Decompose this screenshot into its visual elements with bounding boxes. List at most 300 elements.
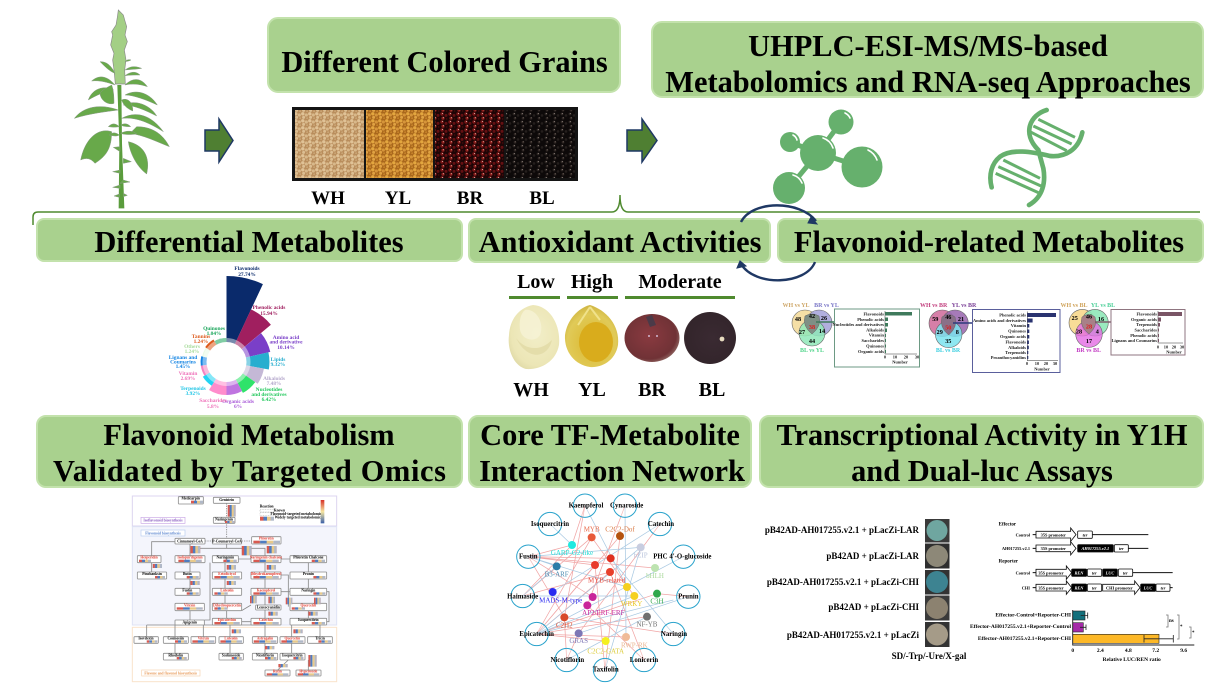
plant illustration — [74, 10, 169, 208]
bar chart: BR comparison: Organic acids — [1000, 334, 1026, 339]
transcription factor labels: MADS-M-type — [539, 596, 582, 604]
metabolite labels — [507, 503, 711, 674]
heading: Transcriptional Activity: Transcriptional Activity in Y1H — [776, 418, 1188, 452]
heading: Core TF-Metabolite — [469, 416, 751, 488]
venn: WH/YL/BR vs BL: 46 — [1086, 314, 1092, 320]
pathway nodes: Leucocyanidin — [257, 606, 280, 610]
Y1H assay labels: pB42AD + pLacZi-LAR — [826, 551, 919, 561]
axis labels — [970, 612, 1187, 663]
antioxidant levels and seeds — [509, 271, 736, 401]
construct labels: REN — [1075, 570, 1084, 575]
Y1H assay labels — [765, 525, 919, 640]
construct labels: ter — [1119, 546, 1124, 551]
seed BR — [624, 314, 680, 362]
bar chart: BL comparison: Saccharides — [1135, 328, 1157, 332]
venn: WH/BR/BL vs YL: 48 — [795, 316, 801, 323]
pathway nodes: Dihydroquercetin — [213, 603, 241, 607]
rose chart labels: Tannins — [192, 334, 210, 340]
venn: WH/YL/BL vs BR: WH vs BR — [920, 303, 948, 309]
pathway nodes: Fustin — [182, 588, 192, 592]
venn: WH/BR/BL vs YL: 38 — [809, 324, 815, 331]
seed labels: BL — [699, 379, 725, 401]
venn: WH/YL/BR vs BL: BR vs BL — [1076, 348, 1101, 354]
rose chart labels: 9.32% — [271, 362, 285, 368]
dual-luciferase constructs: CHI — [1022, 585, 1030, 590]
construct labels: ter — [1092, 570, 1097, 575]
transcription factor labels: bHLH — [646, 572, 664, 580]
venn: WH/YL/BR vs BL: 25 — [1072, 315, 1078, 322]
metabolite labels: Epicatechin — [519, 631, 554, 638]
dual-luciferase constructs: Control — [1016, 570, 1031, 575]
bar chart: BR comparison: Alkaloids — [1008, 345, 1026, 350]
heading: UHPLC-ESI-MS/MS — [652, 22, 1203, 99]
venn: WH/BR/BL vs YL: 27 — [799, 329, 805, 336]
bar chart: BL comparison: 0 — [1157, 344, 1160, 350]
venn: WH/BR/BL vs YL: WH vs YL — [782, 303, 810, 309]
construct labels — [1038, 532, 1166, 590]
arrow: grains to omics — [627, 119, 657, 162]
bar chart: YL comparison: Saccharides — [862, 338, 884, 343]
pathway nodes: Astragalin — [257, 637, 273, 641]
venn: WH/YL/BL vs BR: 21 — [958, 316, 964, 323]
venn: WH/YL/BR vs BL: 28 — [1076, 328, 1082, 336]
transcription factor labels: AP2/ERF-ERF — [582, 609, 625, 617]
grain labels: YL — [385, 188, 411, 209]
axis labels: 0 — [1071, 648, 1074, 654]
arrow: plant to grains — [205, 119, 233, 162]
grain swatch YL — [366, 110, 433, 178]
venn: WH/YL/BL vs BR: 8 — [956, 329, 959, 336]
metabolite labels: Taxifolin — [593, 667, 619, 674]
axis labels: 2.4 — [1097, 648, 1104, 654]
venn: WH/BR/BL vs YL: 26 — [821, 315, 827, 322]
rose chart labels: Phenolic acids — [253, 305, 285, 311]
dual-luciferase constructs: AH017255.v2.1 — [1002, 546, 1030, 551]
bar chart: BL comparison: Phenolic acids — [1130, 333, 1157, 338]
rose chart labels: 3.92% — [186, 391, 200, 397]
pathway section labels — [141, 517, 200, 676]
bar chart: BL comparison — [1095, 310, 1185, 355]
construct labels: LUC — [1143, 585, 1152, 590]
rose chart labels: 10.14% — [277, 345, 295, 351]
axis labels: Relative LUC/REN ratio — [1103, 657, 1161, 663]
pathway nodes: Hesperidin — [140, 556, 158, 560]
axis labels: 7.2 — [1152, 648, 1159, 654]
transcription factor labels: RWP-RK — [621, 641, 648, 649]
heading: Flavonoid Metabolism: Flavonoid Metabolism — [103, 418, 395, 452]
metabolite labels: Naringin — [661, 631, 687, 638]
seed WH — [509, 305, 559, 369]
bar chart: YL comparison: 10 — [893, 354, 898, 360]
rose chart labels: 1.24% — [194, 339, 208, 345]
venn: WH/YL/BR vs BL — [1060, 303, 1115, 354]
axis labels: 4.8 — [1125, 648, 1132, 654]
bar chart: YL comparison: Phenolic acids — [857, 317, 884, 322]
dual-luciferase constructs: Reporter — [999, 559, 1019, 564]
pathway nodes: Vitexin — [198, 637, 209, 641]
rose chart labels: Amino acid — [273, 335, 299, 341]
venn: WH/BR/BL vs YL: 44 — [809, 338, 815, 345]
construct labels: 35S promoter — [1038, 570, 1064, 575]
rose chart labels: Saccharides — [199, 398, 227, 404]
venn: WH/YL/BR vs BL: 4 — [1096, 328, 1099, 336]
significance brackets: * — [1192, 631, 1195, 636]
pathway legend: Widely targeted metabolomics — [275, 516, 323, 520]
rose chart labels: Quinones — [203, 326, 225, 332]
bar chart: BR comparison: Vitamin — [1011, 323, 1027, 328]
rose chart labels: 1.24% — [185, 349, 199, 355]
bar chart: BR comparison: 10 — [1035, 361, 1040, 366]
seed labels: WH — [513, 379, 549, 401]
construct labels: ter — [1161, 585, 1166, 590]
metabolite labels: Nicotiflorin — [550, 657, 584, 664]
construct labels: 35S promoter — [1038, 585, 1064, 590]
Y1H medium label: SD/-Trp/-Ure/X-gal — [892, 651, 967, 661]
panel: isoflavonoid biosynthesis — [132, 496, 337, 526]
heading: Flavonoid Metabolism: Validated by Targeted Omics — [53, 454, 446, 488]
bar chart: BR comparison: 20 — [1044, 361, 1049, 366]
pathway nodes: Dihydrokaempferol — [251, 572, 281, 576]
construct labels: CHI promoter — [1106, 585, 1133, 590]
construct shapes — [1036, 528, 1170, 594]
heading: Flavonoid-related Metabolites: Flavonoid-related Metabolites — [794, 225, 1184, 259]
icon: molecule — [773, 110, 882, 204]
bar chart: YL comparison: Vitamin — [869, 332, 885, 338]
construct labels: ter — [1123, 570, 1128, 575]
seed YL — [565, 305, 618, 367]
metabolite labels: Lonicerin — [630, 657, 658, 664]
rose chart labels: Flavonoids — [234, 266, 260, 272]
heading: UHPLC-ESI-MS/MS: UHPLC-ESI-MS/MS-based — [748, 29, 1108, 63]
construct labels: 35S promoter — [1041, 546, 1066, 551]
transcription factor labels: bZIP — [634, 552, 648, 560]
pathway legend: Known — [274, 509, 285, 513]
transcription factor labels: NF-YB — [637, 620, 658, 628]
bar chart: BR comparison: 30 — [1053, 361, 1058, 366]
bar chart: BL comparison: Organic acids — [1131, 317, 1157, 322]
bar chart: YL comparison: 20 — [904, 354, 909, 360]
pathway map: flavonoid metabolism — [132, 496, 337, 682]
pathway nodes: Isoquercitrin — [298, 618, 319, 622]
level labels: High — [571, 271, 613, 293]
heading: Flavonoid Metabolism — [37, 416, 462, 488]
venn: WH/YL/BR vs BL: 16 — [1098, 316, 1104, 323]
Y1H assay labels: pB42AD-AH017255.v2.1 + pLacZi-CHI — [767, 577, 919, 587]
pathway nodes: Rhoifolin — [168, 653, 183, 657]
grain swatch BR — [435, 110, 504, 178]
error bars — [1080, 612, 1173, 642]
metabolite labels: Prunin — [678, 594, 699, 601]
significance brackets: * — [1180, 625, 1183, 630]
bar chart: BL comparison: Lignans and Coumarins — [1112, 338, 1157, 343]
pathway nodes: Prunin — [303, 572, 314, 576]
bar chart: BL comparison: 20 — [1172, 344, 1177, 350]
heading: Differential Metabolites: Differential Metabolites — [94, 225, 404, 259]
rose chart labels: 27.74% — [238, 272, 256, 278]
venn: WH/YL/BR vs BL: YL vs BL — [1091, 303, 1115, 309]
pathway nodes — [134, 497, 332, 676]
dual-luciferase constructs — [999, 522, 1173, 594]
bracket linking upper row to lower row — [33, 195, 1200, 225]
pathway nodes: Quercetin — [301, 603, 316, 607]
network edges — [523, 506, 688, 670]
pathway nodes: Naringin — [301, 588, 315, 592]
Y1H plate photographs — [925, 519, 950, 647]
venn: WH/YL/BL vs BR: 46 — [945, 314, 951, 321]
bar chart: BR comparison — [953, 310, 1060, 372]
pathway nodes: Quercetin — [285, 637, 300, 641]
gene heatmap tiles — [153, 505, 321, 667]
pathway nodes: Catechin — [259, 618, 273, 622]
seed labels: YL — [578, 379, 606, 401]
metabolite nodes — [511, 494, 700, 682]
venn: WH/YL/BL vs BR: 59 — [932, 316, 938, 323]
circular arrows — [737, 205, 817, 280]
metabolite labels: Cynaroside — [610, 503, 643, 510]
metabolite labels: Isoquercitrin — [531, 521, 569, 528]
pathway nodes: Apigenin — [183, 621, 197, 625]
pathway nodes: Naringenin chalcone — [250, 556, 282, 560]
pathway nodes: Genistein — [219, 498, 234, 502]
bar chart: YL comparison: Nucleotides and derivatives — [833, 322, 884, 327]
dual-luciferase constructs: Effector — [999, 522, 1017, 527]
venn: WH/YL/BL vs BR: YL vs BR — [952, 303, 977, 309]
grain labels: BR — [457, 188, 483, 209]
transcription factor labels: B3-ARF — [545, 571, 569, 579]
pathway legend — [260, 500, 324, 523]
pathway nodes: Scolimoside — [222, 653, 241, 657]
pathway nodes: Epicatechin — [218, 618, 236, 622]
pathway nodes: Naringenin — [215, 517, 233, 521]
metabolite labels: Fustin — [519, 554, 538, 561]
construct labels: REN — [1075, 585, 1084, 590]
bar chart: YL comparison — [816, 309, 920, 367]
level labels — [517, 271, 722, 293]
transcription factor labels: C3H — [650, 597, 664, 605]
transcription factor labels: C2C2-GATA — [587, 648, 624, 656]
rose chart labels: Alkaloids — [263, 376, 285, 382]
level labels: Moderate — [638, 271, 722, 293]
bar chart: BL comparison: 10 — [1164, 344, 1169, 350]
construct labels: 35S promoter — [1041, 532, 1066, 537]
pathway nodes: Vitexin — [184, 603, 195, 607]
pathway nodes: Luteolin — [220, 588, 234, 592]
icon: DNA helix — [990, 110, 1082, 205]
venn: WH/YL/BR vs BL: 17 — [1086, 338, 1092, 345]
heading: Transcriptional Activity: and Dual-luc Assays — [851, 454, 1113, 488]
transcription factor labels — [539, 526, 664, 656]
pathway nodes: Butin — [183, 572, 192, 576]
seed labels: BR — [638, 379, 666, 401]
rose chart labels: and derivative — [269, 340, 303, 346]
venn: WH/BR/BL vs YL: 42 — [809, 313, 815, 320]
rose chart labels: Coumarins — [170, 360, 196, 366]
grain labels: BL — [529, 188, 555, 209]
grain swatch WH — [295, 110, 364, 178]
construct labels: AH017255.v2.1 — [1081, 546, 1109, 551]
seed BL — [684, 312, 736, 364]
venn: WH/YL/BL vs BR: 35 — [945, 338, 951, 345]
bar chart: YL comparison: 30 — [915, 354, 920, 360]
bar chart: BL comparison: Number — [1166, 350, 1182, 354]
venn: WH/YL/BL vs BR: 29 — [937, 329, 943, 336]
heading: Core TF-Metabolite: Core TF-Metabolite — [480, 418, 740, 452]
rose chart labels — [169, 266, 303, 410]
bar chart: BR comparison: Flavonoids — [1006, 340, 1026, 344]
level bars — [509, 296, 735, 299]
pathway nodes: Pinobanksin — [142, 572, 162, 576]
bar chart: YL comparison: Number — [892, 360, 908, 364]
venn: WH/YL/BL vs BR: 50 — [945, 324, 951, 332]
Y1H assay labels: pB42AD + pLacZi-CHI — [828, 602, 919, 612]
heading: Different Colored Grains — [268, 18, 620, 92]
panel: flavonoid biosynthesis — [132, 527, 337, 625]
venn: WH/YL/BL vs BR — [920, 303, 977, 354]
metabolite labels: PHC 4'-O-glucoside — [653, 554, 711, 561]
pathway nodes: Medicarpin — [182, 497, 200, 501]
pathway section labels: Flavonoid biosynthesis — [145, 531, 181, 535]
rose chart labels: 6.42% — [262, 397, 276, 403]
bar chart: BR comparison: Amino acids and derivatives — [973, 318, 1026, 323]
bar chart: relative LUC/REN ratio — [970, 610, 1195, 663]
rose chart labels: Vitamin — [179, 371, 197, 377]
bar chart: YL comparison: Flavonoids — [864, 312, 884, 316]
bar chart: YL comparison: Alkaloids — [866, 328, 884, 332]
heading: Transcriptional Activity — [760, 416, 1203, 488]
rose chart labels: Nucleotides — [256, 387, 282, 393]
transcription factor labels: WRKY — [621, 600, 642, 608]
venn: WH/YL/BR vs BL: 28 — [1086, 324, 1092, 330]
level labels: Low — [517, 271, 555, 293]
bar chart: YL comparison: Quinones — [866, 344, 884, 348]
venn: WH/BR/BL vs YL — [782, 303, 839, 354]
construct labels: LUC — [1105, 570, 1114, 575]
rose chart labels: 6% — [234, 404, 242, 410]
bar chart: YL comparison: Organic acids — [858, 349, 884, 354]
rose chart labels: 7.48% — [267, 381, 281, 387]
pathway nodes: Luteolin — [224, 637, 238, 641]
rose chart labels: 5.8% — [207, 404, 219, 410]
seed labels — [513, 379, 725, 401]
pathway nodes: Eriodictyol — [218, 572, 236, 576]
rose chart labels: Lipids — [271, 357, 285, 363]
transcription factor labels: C2H2 — [556, 621, 573, 629]
Y1H assay labels: pB42AD-AH017255.v2.1 + pLacZi-LAR — [765, 525, 919, 535]
rose chart labels: 2.69% — [181, 376, 195, 382]
heading: Different Colored Grains: Different Colored Grains — [281, 45, 608, 79]
venn: WH/YL/BL vs BR: BL vs BR — [936, 348, 961, 354]
transcription factor labels: C2C2-Dof — [605, 526, 635, 534]
metabolite labels: Catechin — [648, 521, 674, 528]
construct labels: ter — [1092, 585, 1097, 590]
bar chart: BR comparison: Phenolic acids — [999, 312, 1026, 318]
bar chart: BR comparison: Terpenoids — [1005, 350, 1026, 355]
rose chart labels: Lignans and — [169, 355, 197, 361]
rose chart labels: 1.45% — [176, 364, 190, 370]
pathway nodes: Rutin — [273, 670, 282, 674]
pathway connectors — [147, 503, 329, 670]
rose chart labels: 1.04% — [207, 331, 221, 337]
transcription factor labels: GARP-G2-like — [551, 549, 593, 557]
heading: Core TF-Metabolite: Interaction Network — [479, 454, 745, 488]
transcription factor labels: GRAS — [569, 637, 588, 645]
rose chart labels: Others — [184, 344, 200, 350]
axis labels: Effector-AH017255.v2.1+Reporter-Control — [970, 624, 1071, 630]
bar chart: BR comparison: 0 — [1026, 361, 1029, 366]
rose chart labels: 15.94% — [260, 311, 278, 317]
bar chart: YL comparison: 0 — [884, 354, 887, 360]
bar chart: BL comparison: 30 — [1180, 344, 1185, 350]
pathway section labels: Isoflavonoid biosynthesis — [143, 519, 183, 523]
dual-luciferase constructs: Control — [1016, 532, 1031, 537]
transcription factor labels: MYB-related — [588, 576, 626, 584]
pathway section labels: Flavone and flavonol biosynthesis — [144, 671, 197, 675]
grain swatch BL — [506, 110, 575, 178]
pathway nodes: Isovitexin — [138, 637, 154, 641]
venn: WH/BR/BL vs YL: BR vs YL — [814, 303, 839, 309]
pathway legend: Reaction — [260, 504, 274, 508]
bar chart: BR comparison: Proanthocyanidins — [991, 355, 1026, 360]
heading: Differential Metabolites — [37, 219, 462, 261]
grain labels — [311, 188, 555, 209]
Y1H assay labels: pB42AD-AH017255.v2.1 + pLacZi — [787, 630, 919, 640]
significance brackets — [1166, 615, 1195, 639]
venn: WH/BR/BL vs YL: 14 — [819, 328, 825, 335]
significance brackets: ns — [1169, 619, 1174, 624]
bars — [1073, 611, 1159, 643]
bar chart: BR comparison: Quinones — [1008, 328, 1026, 334]
bar chart: BL comparison: Flavonoids — [1136, 312, 1157, 316]
venn: WH/YL/BR vs BL: WH vs BL — [1060, 303, 1088, 309]
transcription factor nodes — [549, 532, 661, 645]
pathway nodes: Isoliquiritigenin — [177, 556, 203, 560]
pathway nodes: Phloretin — [259, 537, 274, 541]
pathway nodes: Kaempferol — [257, 588, 275, 592]
construct labels: ter — [1083, 532, 1088, 537]
grain photographs — [292, 107, 578, 181]
network: TF-metabolite interactions — [507, 494, 711, 682]
grain labels: WH — [311, 188, 345, 209]
pathway nodes: Hyperoside — [299, 670, 318, 674]
axis labels: 9.6 — [1180, 648, 1187, 654]
heading: UHPLC-ESI-MS/MS: Metabolomics and RNA-seq Approaches — [665, 65, 1191, 99]
transcription factor labels: MYB — [584, 526, 600, 534]
axis labels: Effector-AH017255.v2.1+Reporter-CHI — [978, 636, 1071, 642]
pathway nodes: Cinnamoyl-CoA — [177, 539, 203, 543]
rose chart labels: Organic acids — [222, 399, 254, 405]
rose chart labels: Terpenoids — [180, 386, 206, 392]
axis labels: Effector-Control+Reporter-CHI — [995, 612, 1071, 618]
rose chart labels: and derivatives — [251, 392, 287, 398]
pathway nodes: Cosmosiin — [168, 637, 184, 641]
panel: flavone and flavonol biosynthesis — [132, 627, 337, 682]
bar chart: BR comparison: Number — [1034, 366, 1050, 372]
pathway nodes: Naringenin — [216, 556, 234, 560]
venn: WH/BR/BL vs YL: BL vs YL — [800, 348, 824, 354]
pathway nodes: Tricin — [315, 637, 325, 641]
metabolite labels: Kaempferol — [569, 503, 603, 510]
pathway nodes: Nicotiflorin — [256, 653, 274, 657]
heading: Antioxidant Activities: Antioxidant Activities — [479, 225, 762, 259]
bar chart: BL comparison: Terpenoids — [1136, 322, 1157, 327]
metabolite labels: Haimaside — [507, 593, 538, 600]
pathway legend: Flavonoid-targeted metabolomics — [271, 512, 323, 516]
pathway nodes: Phloretin Chalcone — [293, 556, 324, 560]
rose chart: differential metabolites — [169, 266, 303, 410]
axes — [1073, 610, 1194, 645]
pathway nodes: P-Coumaroyl-CoA — [212, 539, 242, 543]
pathway nodes: Isoquercitrin — [282, 653, 303, 657]
